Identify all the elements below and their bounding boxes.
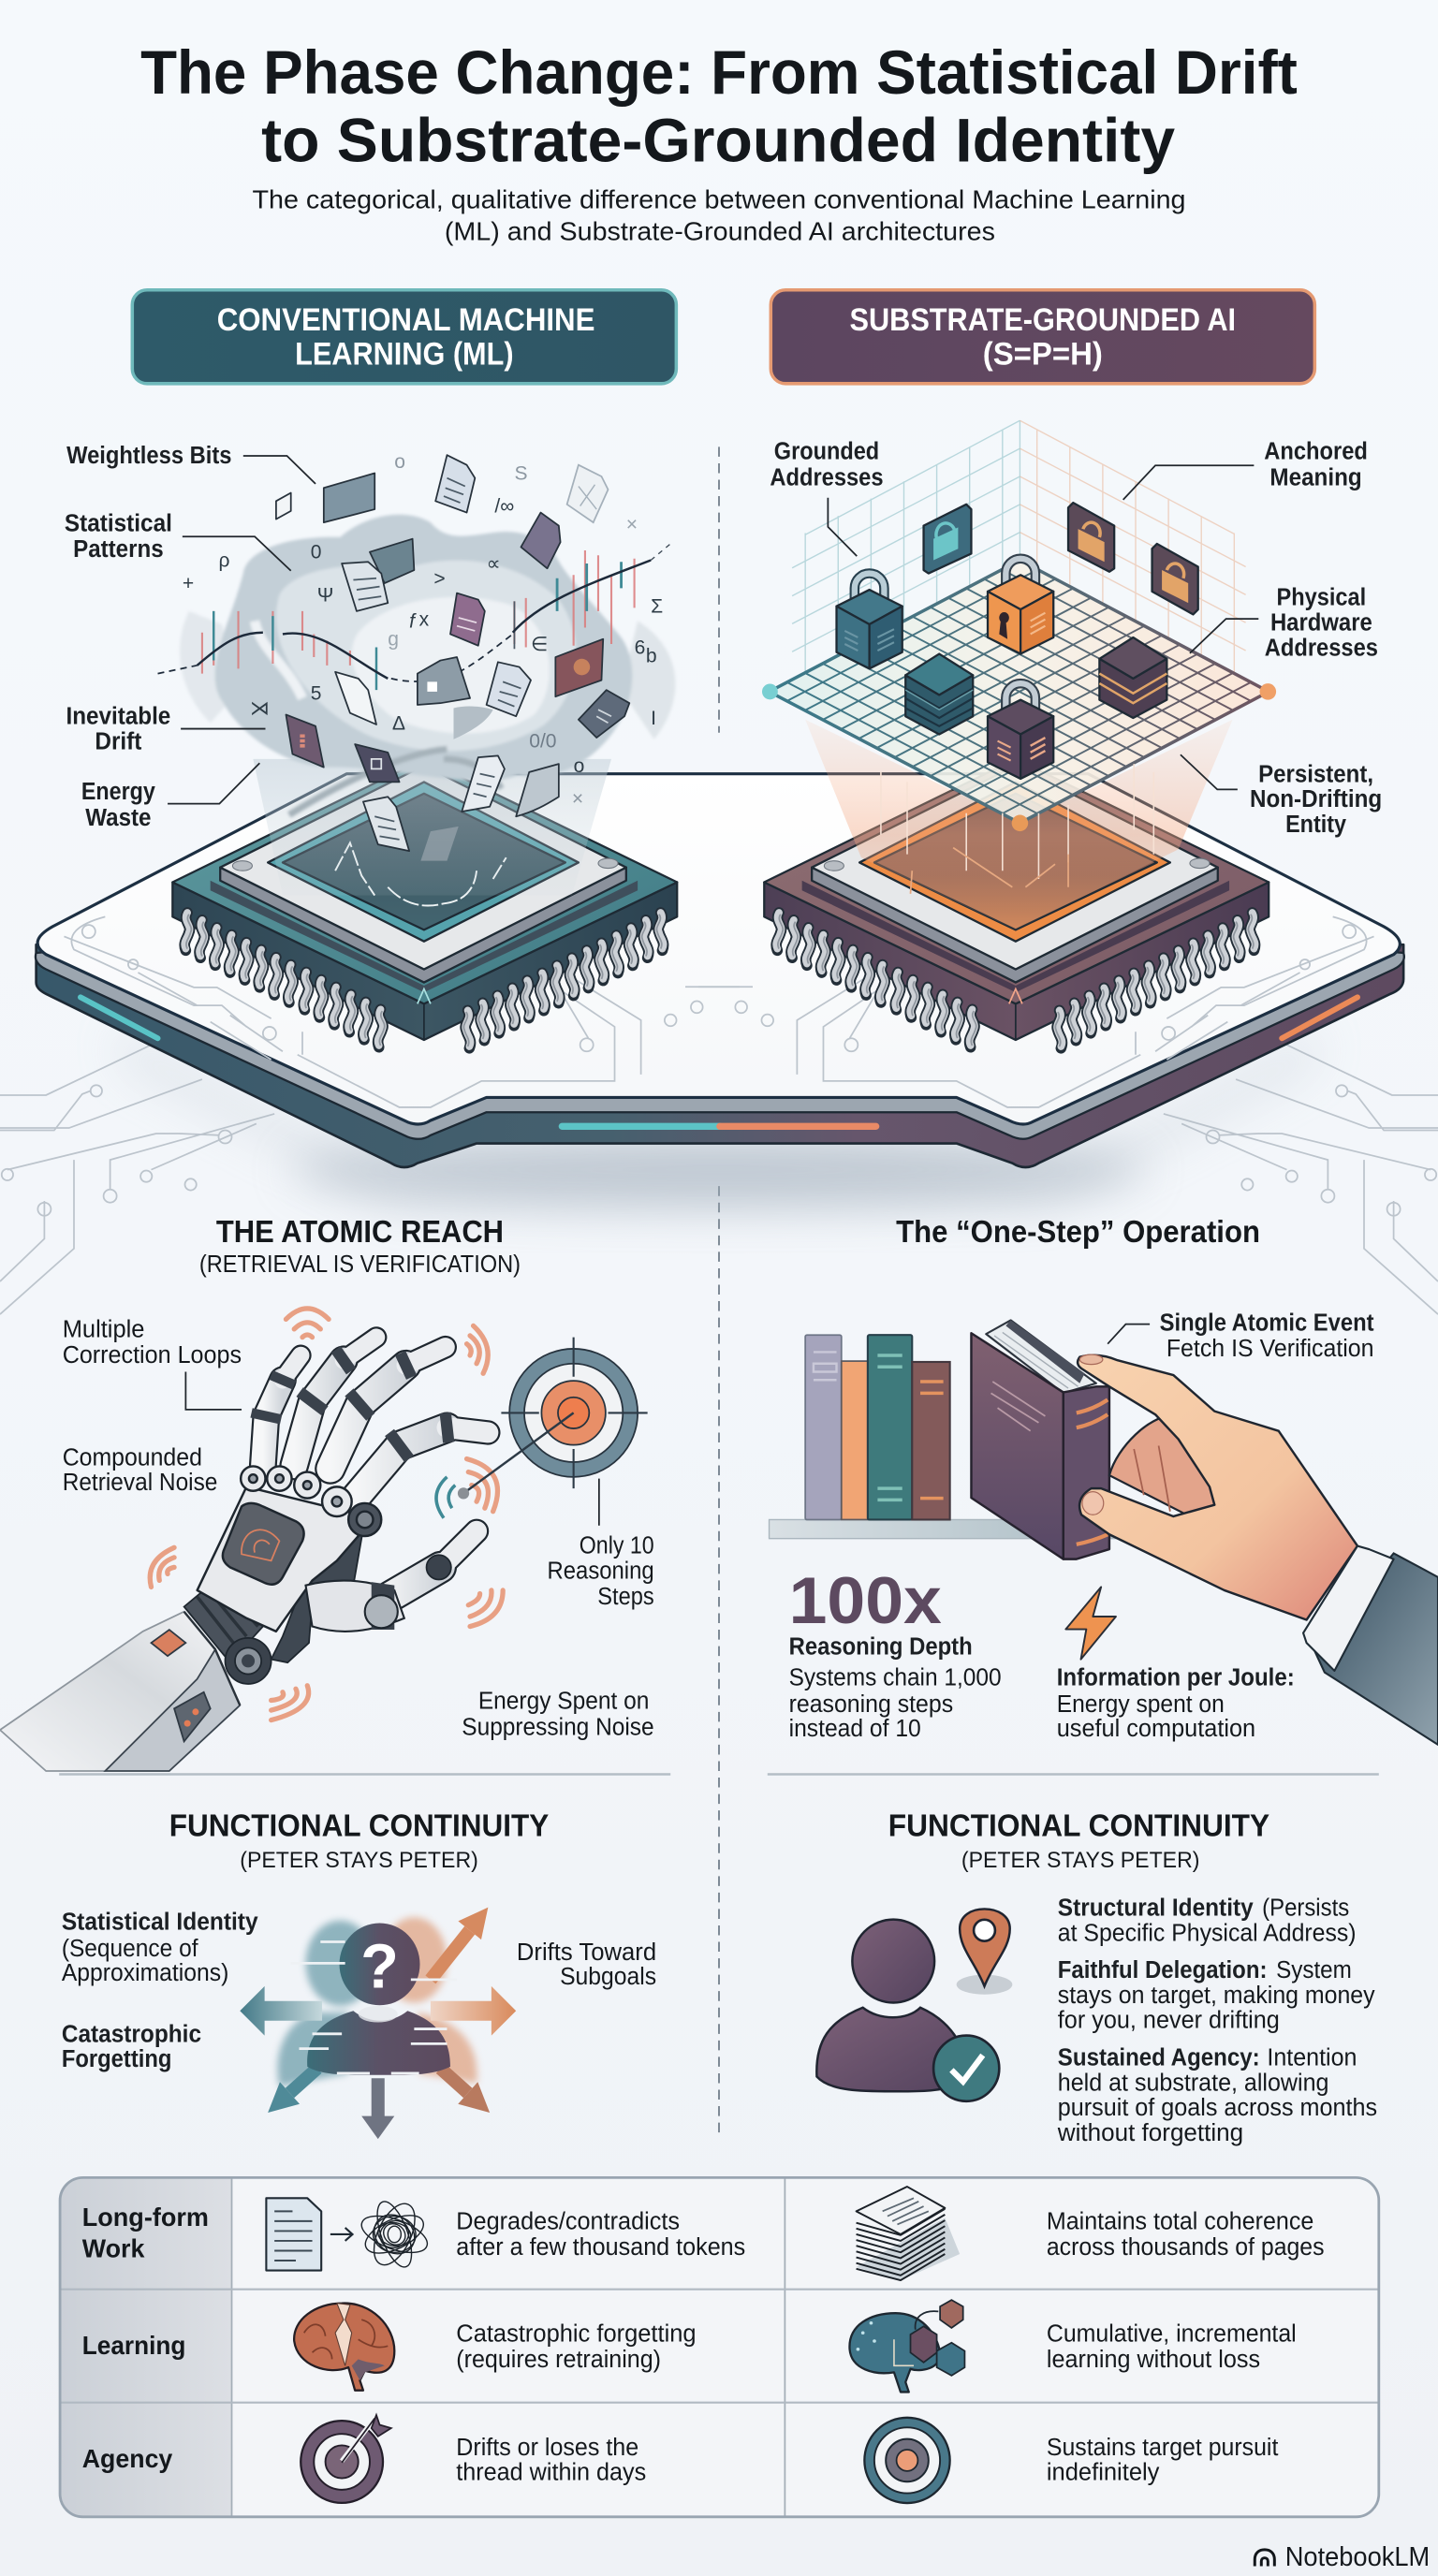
text: learning substrate: Cumulative, incremental bbox=[1047, 2321, 1297, 2348]
wall tile: purple lock 2 bbox=[1152, 544, 1198, 614]
icon: dissolving identity with drift arrows bbox=[240, 1908, 516, 2139]
structural identity text: System bbox=[1276, 1957, 1352, 1983]
math symbols: S bbox=[514, 462, 527, 484]
callout: retrieval noise bbox=[63, 1445, 217, 1496]
structural identity text: Sustained Agency: bbox=[1058, 2045, 1260, 2071]
math symbols: g bbox=[388, 629, 399, 651]
robotic hand illustration bbox=[0, 1309, 648, 1771]
stat: information per joule: Information per Joule: bbox=[1057, 1665, 1295, 1691]
math symbols: ∈ bbox=[531, 634, 548, 655]
icon: learning brain with cubes bbox=[849, 2300, 964, 2392]
subtitle: The categorical, qualitative difference between conventional Machine Learning bbox=[252, 185, 1186, 214]
math symbols: x bbox=[419, 609, 430, 631]
wall tile: teal lock bbox=[924, 505, 971, 574]
math symbols: f bbox=[409, 610, 417, 632]
icon: anchored person with location pin and check bbox=[816, 1909, 1012, 2101]
wall grid: orange bbox=[1020, 420, 1246, 673]
lock: teal bbox=[837, 574, 902, 668]
structural identity text: Intention bbox=[1267, 2045, 1357, 2071]
math symbols: ρ bbox=[218, 550, 229, 572]
text: agency substrate: indefinitely bbox=[1047, 2459, 1160, 2485]
header: substrate-grounded AI bbox=[770, 290, 1314, 384]
drifting identity labels: Forgetting bbox=[62, 2046, 171, 2072]
math symbols: > bbox=[433, 568, 446, 590]
text: long-form substrate: Maintains total coherence bbox=[1047, 2209, 1313, 2235]
callout: grounded addresses: Grounded bbox=[774, 439, 879, 465]
orange ghost bbox=[381, 1917, 477, 2083]
math symbols: ⋊ bbox=[250, 697, 270, 719]
callout: statistical patterns bbox=[65, 510, 291, 571]
noise waves bbox=[150, 1309, 503, 1720]
stat: information per joule bbox=[1057, 1665, 1295, 1742]
callout: grounded addresses bbox=[770, 439, 884, 556]
callout: single atomic event bbox=[1108, 1310, 1374, 1362]
text: agency ML: thread within days bbox=[456, 2459, 646, 2485]
icon: document to tangle bbox=[266, 2198, 432, 2271]
structural identity text: (Persists bbox=[1262, 1895, 1349, 1921]
structural identity text: without forgetting bbox=[1057, 2120, 1243, 2146]
stat: 100x reasoning depth: Systems chain 1,000 bbox=[789, 1665, 1002, 1691]
text: agency substrate bbox=[1047, 2435, 1278, 2485]
callout: energy waste: Energy bbox=[81, 779, 156, 805]
callout: physical hardware addresses: Hardware bbox=[1270, 610, 1372, 637]
callout: physical hardware addresses: Physical bbox=[1277, 584, 1366, 610]
text: learning substrate bbox=[1047, 2321, 1297, 2373]
NotebookLM logo: NotebookLM bbox=[1285, 2542, 1430, 2572]
stack: teal bbox=[905, 654, 973, 735]
icon: cracked brain bbox=[294, 2304, 394, 2391]
shelved books bbox=[805, 1335, 950, 1519]
section heading: functional continuity (substrate): (PETER STAYS PETER) bbox=[961, 1848, 1199, 1873]
cloud body bbox=[180, 515, 675, 815]
section heading: functional continuity (ML) bbox=[169, 1809, 549, 1873]
drifting data cloud bbox=[158, 451, 675, 896]
callout: suppressing noise: Suppressing Noise bbox=[462, 1714, 654, 1740]
text: agency ML: Drifts or loses the bbox=[456, 2435, 638, 2461]
arrows bbox=[240, 1908, 516, 2139]
board mid layer bbox=[36, 920, 1404, 1139]
header: conventional machine learning: CONVENTIONAL MACHINE bbox=[217, 302, 594, 338]
callouts: ML bbox=[65, 443, 315, 831]
text: agency ML bbox=[456, 2435, 646, 2485]
header: substrate-grounded AI: SUBSTRATE-GROUNDED AI bbox=[850, 302, 1236, 338]
callout: suppressing noise: Energy Spent on bbox=[478, 1688, 649, 1714]
location pin bbox=[957, 1909, 1012, 1995]
palm bbox=[198, 1486, 359, 1632]
thumb bbox=[306, 1531, 477, 1632]
energy beams to chip bbox=[805, 720, 1233, 929]
shirt cuff and sleeve bbox=[1303, 1546, 1438, 1745]
person bbox=[339, 1924, 420, 2005]
drifting identity labels: Approximations) bbox=[62, 1960, 228, 1986]
stat: 100x reasoning depth bbox=[789, 1563, 1002, 1742]
drifting identity labels: Drifts Toward bbox=[517, 1939, 656, 1966]
title: The Phase Change: From Statistical Drift bbox=[140, 37, 1298, 107]
chip: conventional ML bbox=[172, 759, 677, 1048]
drift signal chart bbox=[158, 544, 670, 690]
section heading: functional continuity (ML): FUNCTIONAL CONTINUITY bbox=[169, 1809, 549, 1844]
math symbols: /∞ bbox=[494, 496, 514, 518]
structural identity text: Structural Identity bbox=[1058, 1895, 1254, 1921]
section heading: functional continuity (substrate): FUNCTIONAL CONTINUITY bbox=[888, 1809, 1269, 1844]
finger: middle bbox=[330, 1347, 446, 1469]
board light strips bbox=[81, 997, 1357, 1126]
math symbols: × bbox=[626, 514, 638, 535]
table frame bbox=[60, 2177, 1379, 2517]
callout: physical hardware addresses: Addresses bbox=[1265, 635, 1378, 661]
structural identity text bbox=[1057, 1895, 1377, 2146]
wall tile: purple lock 1 bbox=[1068, 503, 1114, 572]
floating documents bbox=[276, 455, 629, 861]
forearm bbox=[0, 1612, 240, 1771]
section heading: the atomic reach: THE ATOMIC REACH bbox=[216, 1215, 504, 1250]
section heading: the atomic reach: (RETRIEVAL IS VERIFICATION) bbox=[199, 1251, 521, 1278]
subtitle bbox=[252, 185, 1186, 246]
callout: energy waste bbox=[81, 763, 259, 831]
knuckles bbox=[241, 1466, 381, 1536]
math symbols: 0 bbox=[311, 542, 321, 564]
math symbols: 5 bbox=[311, 683, 321, 705]
callout: inevitable drift: Inevitable bbox=[66, 704, 170, 730]
target bbox=[458, 1338, 648, 1500]
text: long-form ML: Degrades/contradicts bbox=[456, 2209, 680, 2235]
callout: weightless bits: Weightless Bits bbox=[66, 443, 232, 469]
stat: information per joule: useful computation bbox=[1057, 1716, 1255, 1742]
math symbols: ∆ bbox=[393, 712, 405, 734]
wrist bbox=[184, 1519, 365, 1684]
structural identity text: at Specific Physical Address) bbox=[1058, 1920, 1357, 1946]
callout: persistent entity: Non-Drifting bbox=[1250, 786, 1382, 812]
callout: correction loops: Correction Loops bbox=[63, 1342, 242, 1368]
callout: anchored meaning bbox=[1123, 439, 1368, 500]
callout: suppressing noise bbox=[462, 1688, 654, 1740]
callout: energy waste: Waste bbox=[85, 805, 151, 831]
callout: anchored meaning: Meaning bbox=[1269, 464, 1362, 490]
callout: retrieval noise: Retrieval Noise bbox=[63, 1470, 217, 1496]
callout: grounded addresses: Addresses bbox=[770, 464, 884, 490]
math symbols: + bbox=[183, 573, 194, 594]
icon: sustained target bbox=[864, 2418, 950, 2503]
section heading: functional continuity (ML): (PETER STAYS PETER) bbox=[240, 1848, 478, 1873]
finger: little bbox=[252, 1355, 301, 1466]
callout: persistent entity: Persistent, bbox=[1258, 761, 1373, 787]
text: learning ML: (requires retraining) bbox=[456, 2347, 661, 2373]
stat: 100x reasoning depth: reasoning steps bbox=[789, 1691, 953, 1718]
math symbols: b bbox=[646, 645, 657, 666]
callout: reasoning steps: Reasoning bbox=[548, 1559, 654, 1585]
structural identity text: pursuit of goals across months bbox=[1058, 2095, 1377, 2121]
teal ghost bbox=[278, 1921, 374, 2086]
icon: dissolving identity with drift arrows: ? bbox=[360, 1933, 399, 2002]
math symbols: × bbox=[572, 788, 583, 810]
callout: single atomic event: Single Atomic Event bbox=[1160, 1310, 1374, 1337]
callout: statistical patterns: Patterns bbox=[73, 536, 164, 563]
subtitle: (ML) and Substrate-Grounded AI architectures bbox=[445, 217, 995, 246]
math symbols: Ψ bbox=[317, 584, 333, 606]
callouts: atomic reach bbox=[63, 1317, 654, 1740]
board top surface bbox=[37, 774, 1400, 1124]
section heading: the atomic reach bbox=[199, 1215, 521, 1278]
grid nodes bbox=[762, 683, 1276, 831]
drifting identity labels: Subgoals bbox=[560, 1964, 656, 1990]
structural identity text: stays on target, making money bbox=[1058, 1983, 1375, 2009]
callout: statistical patterns: Statistical bbox=[65, 510, 172, 536]
chip: substrate-grounded bbox=[764, 759, 1269, 1048]
math symbols: 6 bbox=[635, 637, 645, 659]
finger: index bbox=[355, 1412, 488, 1499]
callout: reasoning steps bbox=[548, 1479, 654, 1610]
row labels: Agency bbox=[82, 2444, 173, 2473]
board base bbox=[37, 944, 1403, 1167]
stat: 100x reasoning depth: 100x bbox=[789, 1563, 942, 1637]
row labels bbox=[82, 2203, 209, 2473]
mist column to chip bbox=[253, 759, 611, 896]
callout: reasoning steps: Only 10 bbox=[580, 1532, 654, 1559]
pulled book bbox=[971, 1320, 1109, 1559]
callout: reasoning steps: Steps bbox=[597, 1584, 654, 1610]
drifting identity labels: Catastrophic bbox=[62, 2022, 201, 2048]
math symbols: ∝ bbox=[487, 553, 501, 575]
callout: single atomic event: Fetch IS Verification bbox=[1167, 1336, 1374, 1362]
math symbols: Σ bbox=[651, 596, 663, 618]
circuit board platform bbox=[36, 774, 1404, 1167]
plate circuit traces bbox=[64, 916, 1374, 1107]
text: long-form ML: after a few thousand tokens bbox=[456, 2234, 745, 2261]
stat: 100x reasoning depth: instead of 10 bbox=[789, 1716, 921, 1742]
lock: purple bbox=[988, 683, 1053, 779]
text: agency substrate: Sustains target pursuit bbox=[1047, 2435, 1278, 2461]
callout: anchored meaning: Anchored bbox=[1264, 439, 1368, 465]
finger: ring bbox=[294, 1338, 376, 1466]
callout: weightless bits bbox=[66, 443, 315, 484]
text: long-form ML bbox=[456, 2209, 745, 2261]
title bbox=[140, 37, 1298, 175]
reaching hand bbox=[1078, 1354, 1357, 1620]
background circuit traces bbox=[0, 1045, 1438, 1314]
text: long-form substrate bbox=[1047, 2209, 1325, 2261]
lock: orange bbox=[988, 559, 1053, 654]
section heading: functional continuity (substrate) bbox=[888, 1809, 1269, 1873]
floor grid bbox=[770, 560, 1269, 823]
header: substrate-grounded AI: (S=P=H) bbox=[983, 337, 1103, 373]
callout: inevitable drift: Drift bbox=[95, 728, 142, 754]
bookshelf illustration bbox=[770, 1320, 1438, 1745]
structural identity text: Faithful Delegation: bbox=[1058, 1957, 1267, 1983]
text: learning ML: Catastrophic forgetting bbox=[456, 2321, 697, 2348]
text: learning ML bbox=[456, 2321, 697, 2373]
header: conventional machine learning: LEARNING (ML) bbox=[295, 337, 514, 373]
shelf bbox=[770, 1519, 1123, 1539]
header: conventional machine learning bbox=[132, 290, 676, 384]
stat: information per joule: Energy spent on bbox=[1057, 1691, 1225, 1718]
callout: persistent entity: Entity bbox=[1285, 812, 1347, 838]
shadow under board bbox=[115, 1027, 1323, 1208]
comparison table bbox=[60, 2177, 1379, 2517]
callout: correction loops: Multiple bbox=[63, 1317, 144, 1343]
callout: inevitable drift bbox=[66, 704, 266, 754]
callout: retrieval noise: Compounded bbox=[63, 1445, 202, 1471]
beam filaments bbox=[881, 764, 1153, 879]
section heading: one-step operation: The “One-Step” Operation bbox=[896, 1215, 1260, 1250]
math symbols bbox=[183, 451, 663, 810]
drifting identity labels: Statistical Identity bbox=[62, 1910, 258, 1936]
stack: purple bbox=[1099, 637, 1167, 718]
title: to Substrate-Grounded Identity bbox=[261, 106, 1176, 175]
grounded address lattice bbox=[762, 420, 1276, 929]
math symbols: I bbox=[651, 708, 656, 729]
text: long-form substrate: across thousands of pages bbox=[1047, 2234, 1325, 2261]
structural identity text: held at substrate, allowing bbox=[1058, 2070, 1328, 2096]
text: learning substrate: learning without loss bbox=[1047, 2347, 1260, 2373]
row labels: Learning bbox=[82, 2331, 185, 2360]
drifting identity labels: (Sequence of bbox=[62, 1936, 198, 1962]
callout: persistent entity bbox=[1181, 754, 1382, 838]
drifting identity labels bbox=[62, 1910, 656, 2072]
row labels: Work bbox=[82, 2234, 145, 2263]
callout: physical hardware addresses bbox=[1190, 584, 1378, 661]
math symbols: o bbox=[574, 755, 584, 777]
structural identity text: for you, never drifting bbox=[1058, 2008, 1280, 2034]
row labels: Long-form bbox=[82, 2203, 209, 2232]
in-chip circuitry bbox=[911, 848, 1068, 894]
icon: lightning bolt bbox=[1065, 1587, 1116, 1660]
icon: stacked pages bbox=[857, 2187, 960, 2280]
math symbols: o bbox=[394, 451, 405, 473]
stat: 100x reasoning depth: Reasoning Depth bbox=[789, 1633, 973, 1660]
icon: missed target bbox=[301, 2415, 391, 2503]
callouts: substrate-grounded bbox=[770, 439, 1382, 838]
wall grid: teal bbox=[792, 420, 1020, 673]
math symbols: 0/0 bbox=[529, 731, 557, 753]
callout: correction loops bbox=[63, 1317, 242, 1410]
check badge bbox=[933, 2036, 999, 2101]
